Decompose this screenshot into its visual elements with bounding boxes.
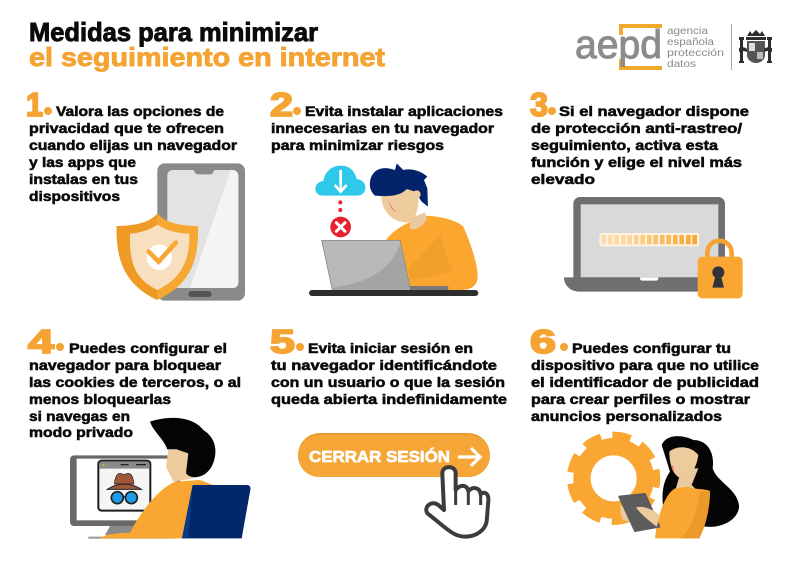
icon: pointing hand [426, 467, 488, 537]
panel: step 2 [270, 86, 503, 296]
text block 1: instalas en tus [29, 171, 138, 187]
title [29, 17, 385, 72]
text block 1: privacidad que te ofrecen [29, 120, 224, 136]
text block 6: para crear perfiles o mostrar [531, 391, 751, 407]
logo: aepd [575, 23, 732, 70]
number 2: 2 [270, 86, 293, 123]
text block 4: las cookies de terceros, o al [29, 374, 241, 390]
title: el seguimiento en internet [29, 42, 385, 72]
text block 2: Evita instalar aplicaciones [305, 103, 503, 119]
text block 4: modo privado [29, 424, 133, 440]
text block 2 [271, 103, 503, 153]
text block 6: anuncios personalizados [531, 408, 722, 424]
text block 1 [29, 103, 238, 204]
button: cerrar sesión: CERRAR SESIÓN [309, 447, 450, 466]
text block 4 [29, 340, 241, 440]
number 1: 1 [26, 86, 43, 123]
panel: step 6 [530, 323, 759, 538]
text block 5: tu navegador identificándote [271, 357, 497, 373]
text block 3: seguimiento, activa esta [531, 137, 718, 153]
text block 2: para minimizar riesgos [271, 137, 444, 153]
panel: step 3 [530, 86, 749, 298]
text block 1: dispositivos [29, 188, 120, 204]
logo: aepd: aepd [575, 23, 662, 67]
number 2 [270, 86, 301, 123]
text block 2: innecesarias en tu navegador [271, 120, 495, 136]
text block 3: función y elige el nivel más [531, 154, 742, 170]
panel: step 5 [270, 323, 507, 537]
number 4: 4 [28, 323, 55, 360]
arrow [458, 448, 480, 466]
text block 3: elevado [531, 171, 595, 187]
button: cerrar sesión [298, 433, 490, 477]
text block 4: navegador para bloquear [29, 357, 222, 373]
text block 6: Puedes configurar tu [572, 340, 731, 356]
text block 1: Valora las opciones de [56, 103, 224, 119]
logo: aepd: protección [667, 47, 724, 59]
logo: aepd: española [667, 36, 714, 48]
text block 4: menos bloquearlas [29, 391, 171, 407]
text block 6: el identificador de publicidad [531, 374, 759, 390]
number 5 [270, 323, 304, 360]
number 6 [530, 323, 568, 360]
number 3: 3 [530, 86, 548, 123]
number 4 [28, 323, 64, 360]
text block 6 [531, 340, 759, 424]
illustration: person at laptop with blocked download [309, 163, 478, 296]
text block 4: Puedes configurar el [69, 340, 227, 356]
text block 1: cuando elijas un navegador [29, 137, 238, 153]
illustration: person at monitor in incognito mode [70, 418, 250, 539]
text block 1: y las apps que [29, 154, 136, 170]
text block 3: de protección anti-rastreo/ [531, 120, 742, 136]
icon: coat of arms [739, 30, 772, 63]
number 6: 6 [530, 323, 556, 360]
panel: step 1 [26, 86, 245, 301]
text block 5: queda abierta indefinidamente [271, 391, 507, 407]
text block 4: si navegas en [29, 408, 130, 424]
illustration: gear and woman with tablet [572, 436, 739, 538]
panel: step 4 [28, 323, 250, 539]
text block 3: Si el navegador dispone [559, 103, 749, 119]
logo: aepd: datos [667, 58, 696, 70]
text block 5: con un usuario o que la sesión [271, 374, 505, 390]
text block 5: Evita iniciar sesión en [308, 340, 473, 356]
logo: aepd: agencia [667, 25, 708, 37]
text block 3 [531, 103, 749, 187]
number 5: 5 [270, 323, 295, 360]
icon: phone with shield [117, 163, 245, 301]
illustration: laptop with padlock [564, 197, 743, 298]
text block 5 [271, 340, 507, 407]
title: Medidas para minimizar [29, 17, 318, 47]
text block 6: dispositivo para que no utilice [531, 357, 759, 373]
